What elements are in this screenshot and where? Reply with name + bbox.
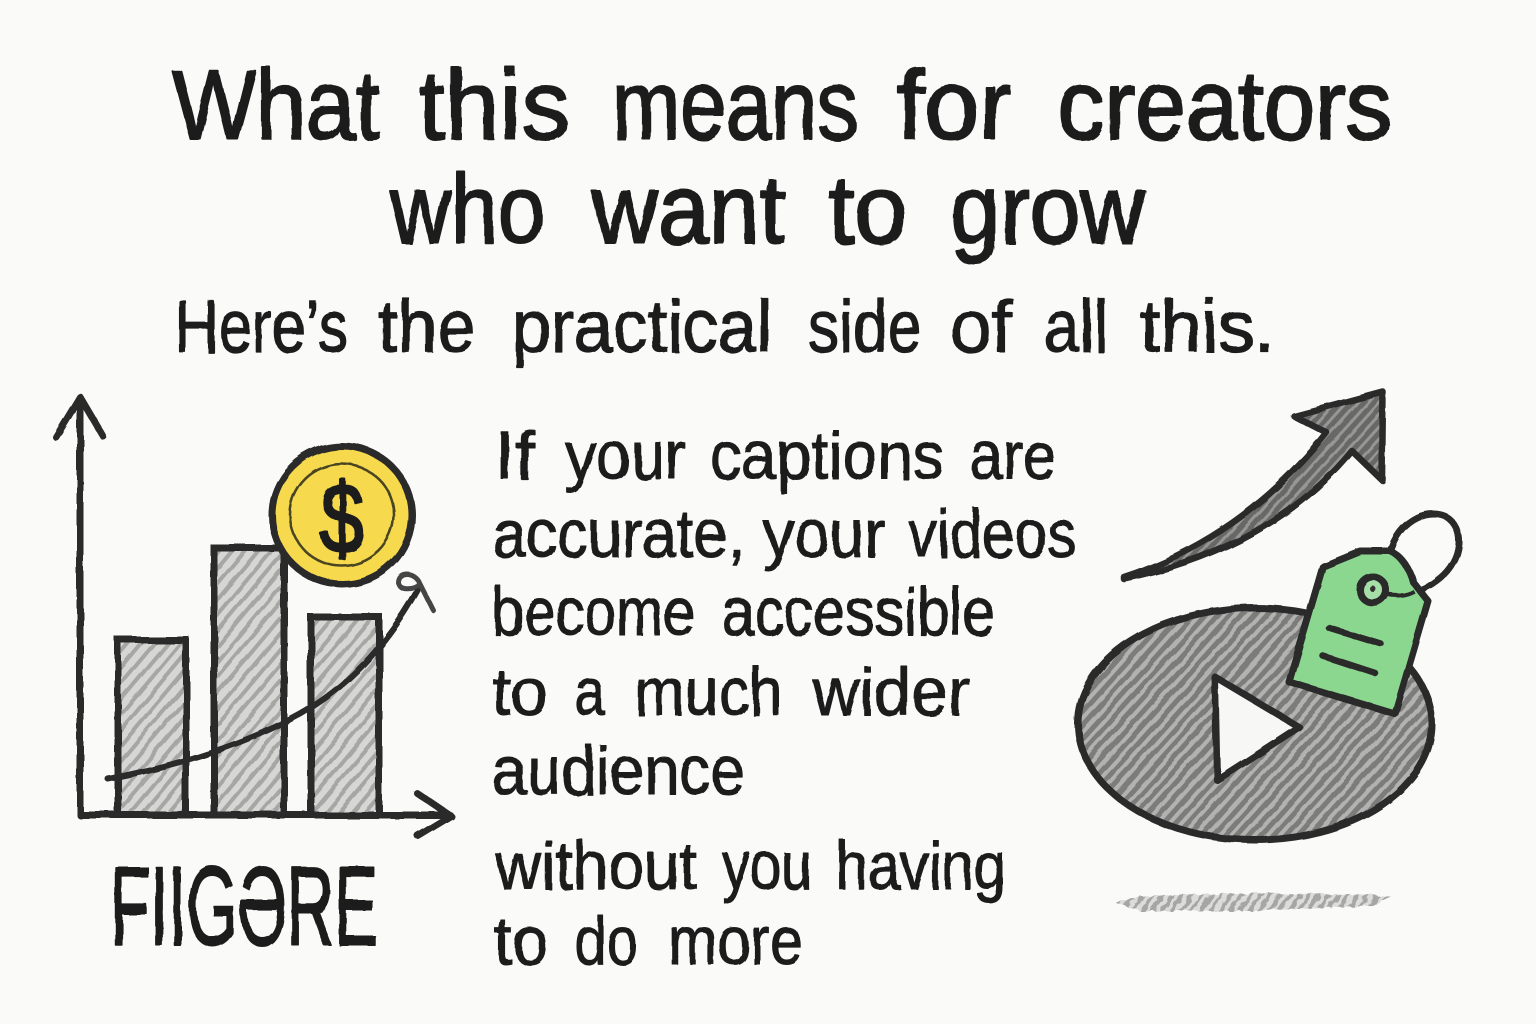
title: to: [828, 154, 907, 264]
body text: closing message: do: [575, 903, 638, 979]
trend arrow: [108, 586, 420, 779]
subtitle: of: [950, 285, 1012, 368]
subtitle: practical: [512, 285, 772, 368]
title: means: [612, 50, 858, 160]
video play icon with tag: [1078, 514, 1459, 840]
icon: dollar coin: $: [320, 463, 364, 573]
ground shadow: [1116, 893, 1392, 911]
growth arrow: [1124, 392, 1383, 579]
title: What: [172, 50, 380, 160]
title: want: [591, 154, 785, 264]
body text: main message: wider: [811, 654, 970, 730]
body text: main message: to: [492, 654, 548, 730]
subtitle: side: [808, 285, 922, 368]
body text: closing message: [494, 828, 1006, 979]
body text: closing message: you: [722, 828, 812, 904]
bar 1: [118, 640, 186, 815]
body text: main message: your: [565, 418, 686, 494]
body text: main message: captions: [710, 418, 944, 494]
subtitle: all: [1044, 285, 1108, 368]
body text: main message: are: [970, 418, 1056, 494]
body text: main message: become: [492, 574, 695, 650]
body text: main message: videos: [908, 496, 1076, 572]
tag string: [1385, 514, 1459, 595]
title: this: [418, 50, 570, 160]
bar 3: [311, 617, 379, 815]
body text: main message: If: [495, 418, 535, 494]
title: who: [389, 154, 545, 264]
body text: main message: accurate,: [492, 496, 745, 572]
chart: bars with rising trend and coin: [56, 397, 451, 836]
title: for: [897, 50, 1012, 160]
title: grow: [950, 154, 1146, 264]
body text: main message: [492, 418, 1076, 809]
body text: main message: accessible: [722, 574, 995, 650]
body text: closing message: to: [494, 903, 548, 979]
body text: closing message: without: [494, 828, 697, 904]
body text: main message: a: [575, 654, 605, 730]
price tag: [1289, 551, 1428, 714]
title: creators: [1058, 50, 1392, 160]
body text: closing message: having: [836, 828, 1006, 904]
body text: closing message: more: [668, 903, 803, 979]
body text: main message: audience: [492, 733, 745, 809]
title: [172, 50, 1392, 264]
chart axes: [56, 397, 451, 836]
body text: main message: your: [763, 496, 885, 572]
play triangle: [1215, 677, 1299, 780]
chart label: FIIGƏRE: [110, 844, 378, 969]
body text: main message: much: [634, 654, 783, 730]
subtitle: [175, 285, 1275, 368]
subtitle: the: [378, 285, 476, 368]
bar 2: [214, 548, 284, 815]
subtitle: this.: [1140, 285, 1275, 368]
video oval: [1078, 608, 1432, 840]
icon: dollar coin: [272, 446, 412, 584]
subtitle: Here’s: [175, 285, 348, 368]
